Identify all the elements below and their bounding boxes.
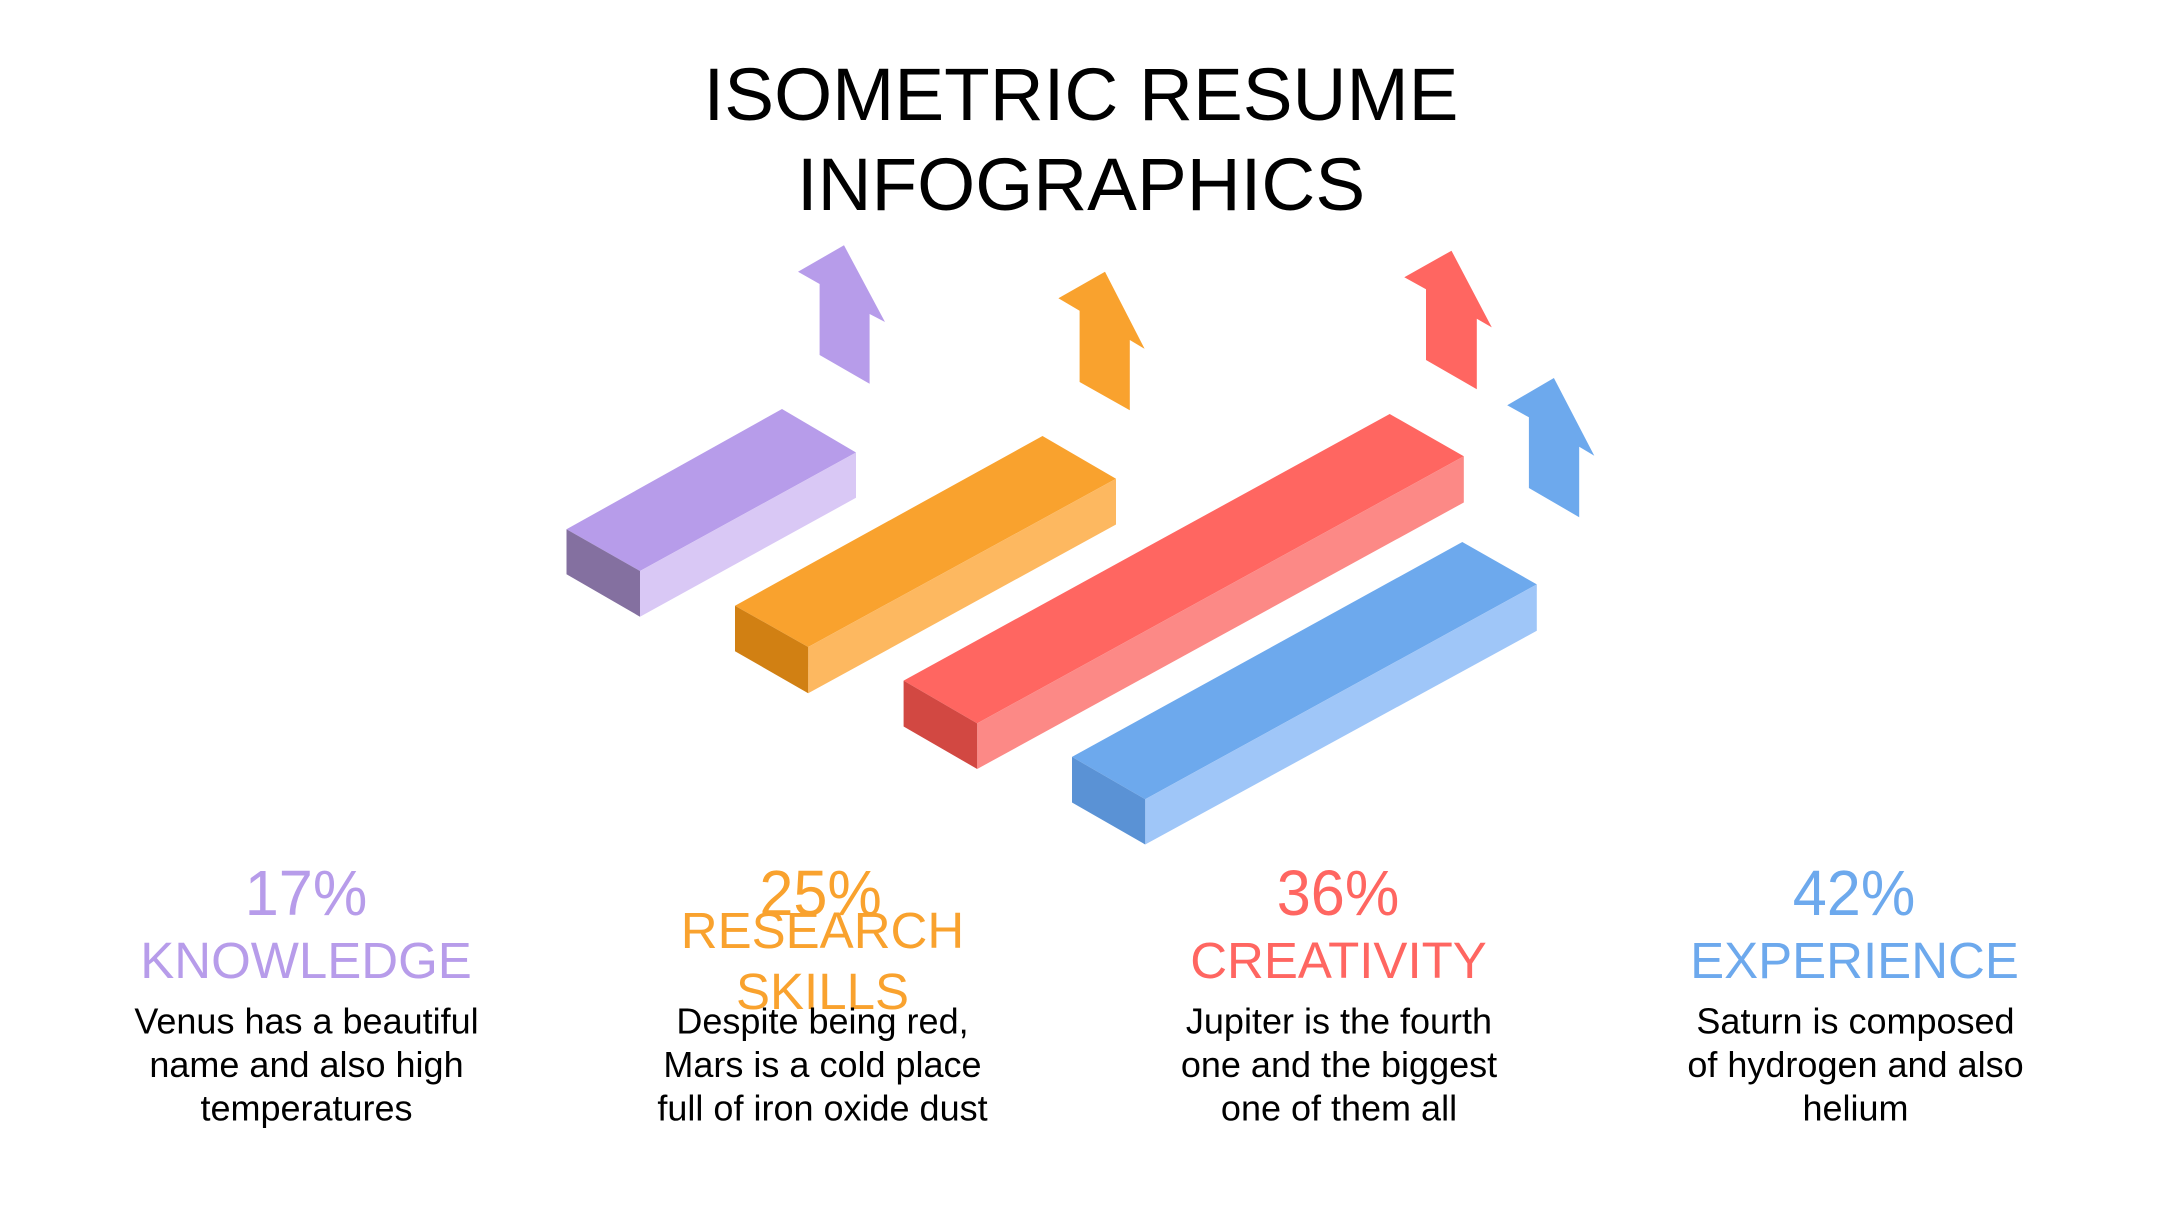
- description: knowledge: Venus has a beautiful: [134, 1000, 479, 1042]
- panel: creativity: [1181, 857, 1497, 1128]
- label: research skills: RESEARCH: [681, 902, 964, 959]
- description: experience: helium: [1802, 1088, 1909, 1128]
- description: knowledge: name and also high: [149, 1044, 464, 1085]
- label: creativity: CREATIVITY: [1190, 932, 1487, 989]
- percentage: 36%: 36%: [1277, 857, 1399, 929]
- description: research skills: full of iron oxide dust: [657, 1088, 988, 1128]
- description: experience: Saturn is composed: [1696, 1000, 2015, 1042]
- description: creativity: Jupiter is the fourth: [1186, 1000, 1492, 1042]
- bar: creativity 36%: [904, 414, 1464, 769]
- description: creativity: one of them all: [1221, 1088, 1457, 1128]
- description: research skills: Despite being red,: [676, 1000, 969, 1042]
- panel: knowledge: [134, 857, 479, 1128]
- panel: research skills: [657, 857, 988, 1128]
- description: creativity: [1181, 1000, 1497, 1128]
- percentage: 25%: 25%: [759, 857, 882, 929]
- percentage: 42%: 42%: [1793, 857, 1915, 929]
- panel: experience: [1687, 857, 2024, 1128]
- label: research skills: [681, 902, 964, 1020]
- title: ISOMETRIC RESUME: [704, 52, 1458, 136]
- description: creativity: one and the biggest: [1181, 1044, 1497, 1085]
- description: experience: of hydrogen and also: [1687, 1044, 2024, 1085]
- label: experience: EXPERIENCE: [1690, 932, 2019, 989]
- bar: experience 42%: [1072, 542, 1537, 844]
- icon: purple up arrow: [798, 245, 885, 384]
- title: INFOGRAPHICS: [797, 142, 1365, 226]
- description: experience: [1687, 1000, 2024, 1128]
- label: knowledge: KNOWLEDGE: [140, 932, 472, 989]
- label: research skills: SKILLS: [736, 963, 909, 1020]
- description: research skills: [657, 1000, 988, 1128]
- icon: blue up arrow: [1507, 378, 1594, 517]
- bar: knowledge 17%: [566, 409, 856, 617]
- icon: red up arrow: [1404, 251, 1492, 389]
- icon: orange up arrow: [1058, 272, 1145, 410]
- description: research skills: Mars is a cold place: [663, 1044, 982, 1085]
- percentage: 17%: 17%: [245, 857, 367, 929]
- description: knowledge: [134, 1000, 479, 1128]
- title: [704, 52, 1458, 226]
- bar: research skills 25%: [735, 436, 1116, 693]
- description: knowledge: temperatures: [200, 1088, 413, 1128]
